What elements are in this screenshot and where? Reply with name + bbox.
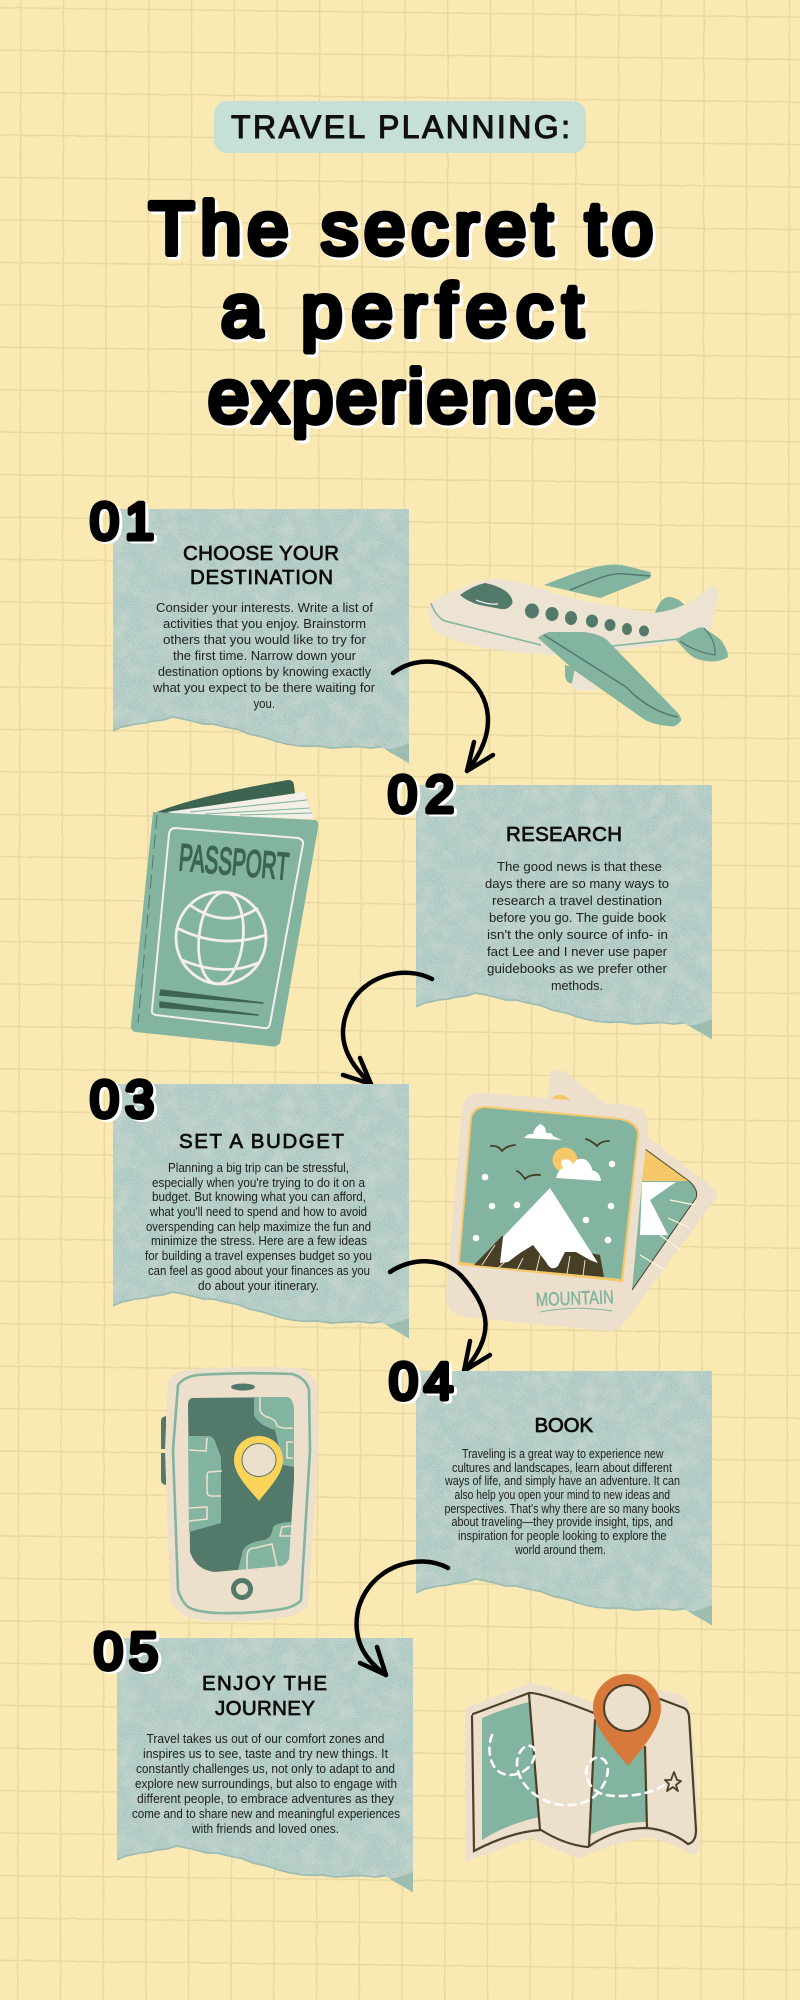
body text: step 4: perspectives. That's why there are so many books [444,1502,680,1516]
title: The secret to [149,187,653,270]
body text: step 4: cultures and landscapes, learn about different [452,1461,672,1475]
number 03: 03 [90,1071,154,1129]
icon: folded map with pin [465,1674,699,1862]
icon: passport [131,780,318,1047]
body text: step 5: come and to share new and meaningful experiences [132,1807,400,1821]
title badge [214,101,586,153]
heading: book: BOOK [534,1414,593,1437]
number 04: 04 [389,1353,453,1411]
arrow 2 to 3 [343,973,432,1084]
body text: step 2: fact Lee and I never use paper [487,945,667,959]
body text: step 3: can feel as good about your finances as you [148,1264,370,1278]
heading: choose your destination [183,542,339,589]
body text: step 3: especially when you're trying to do it on a [152,1176,365,1190]
body text: step 1: destination options by knowing exactly [158,665,372,679]
heading: enjoy the journey [202,1672,327,1720]
passport label: PASSPORT [177,837,290,889]
body text: step 2 [485,860,669,993]
heading: research: RESEARCH [506,823,622,846]
body text: step 5: Travel takes us out of our comfort zones and [146,1732,385,1746]
panel: 03 set a budget [90,1071,409,1338]
panel: 04 book [389,1353,712,1626]
body text: step 4: ways of life, and simply have an adventure. It can [444,1474,680,1488]
body text: step 1: what you expect to be there waiting for [152,681,375,695]
body text: step 2: isn't the only source of info- in [487,928,668,942]
body text: step 3: Planning a big trip can be stressful, [168,1161,349,1175]
number 01: 01 [90,493,154,551]
arrow 4 to 5 [357,1561,448,1675]
body text: step 2: methods. [551,979,603,993]
body text: step 1 [152,601,375,711]
body text: step 4: also help you open your mind to new ideas and [454,1488,670,1502]
arrow 3 to 4 [390,1261,490,1371]
body text: step 4: Traveling is a great way to experience new [462,1447,664,1461]
body text: step 2: before you go. The guide book [489,911,667,925]
body text: step 5: with friends and loved ones. [191,1822,339,1836]
mountain label: MOUNTAIN [535,1287,614,1311]
panel: 02 research [388,766,712,1040]
body text: step 5: different people, to embrace adventures as they [137,1792,395,1806]
body text: step 3: minimize the stress. Here are a few ideas [151,1234,367,1248]
body text: step 1: the first time. Narrow down your [173,649,356,663]
body text: step 5 [132,1732,400,1836]
title [149,187,653,438]
body text: step 4: inspiration for people looking to explore the [458,1529,667,1543]
body text: step 3 [145,1161,372,1293]
body text: step 1: activities that you enjoy. Brainstorm [163,617,366,631]
heading: enjoy the journey: JOURNEY [215,1697,315,1720]
body text: step 1: others that you would like to try for [163,633,366,647]
panel: 01 choose your destination [90,493,409,764]
icon: airplane [428,565,728,726]
number 05: 05 [94,1623,158,1681]
icon: smartphone map [161,1367,318,1621]
body text: step 2: research a travel destination [492,894,662,908]
body text: step 5: constantly challenges us, not only to adapt to and [136,1762,395,1776]
heading: enjoy the journey: ENJOY THE [202,1672,327,1695]
body text: step 3: overspending can help maximize the fun and [146,1220,371,1234]
body text: step 3: budget. But knowing what you can afford, [152,1190,366,1204]
title badge: TRAVEL PLANNING: [231,109,570,145]
body text: step 2: The good news is that these [497,860,662,874]
body text: step 3: do about your itinerary. [198,1279,319,1293]
body text: step 3: what you'll need to spend and how to avoid [149,1205,367,1219]
body text: step 1: Consider your interests. Write a list of [156,601,374,615]
body text: step 2: days there are so many ways to [485,877,669,891]
arrow 1 to 2 [393,662,493,771]
heading: set a budget: SET A BUDGET [179,1130,344,1153]
title: a perfect [221,269,583,352]
body text: step 4: world around them. [514,1543,606,1557]
body text: step 4: about traveling—they provide insight, tips, and [452,1515,673,1529]
icon: mountain photos [446,1070,718,1331]
body text: step 5: explore new surroundings, but also to engage with [135,1777,397,1791]
heading: choose your destination: CHOOSE YOUR [183,542,339,565]
title: experience [208,355,596,438]
body text: step 2: guidebooks as we prefer other [487,962,667,976]
heading: choose your destination: DESTINATION [190,566,333,589]
body text: step 5: inspires us to see, taste and try new things. It [143,1747,389,1761]
number 02: 02 [388,766,454,824]
body text: step 1: you. [254,697,275,711]
body text: step 4 [444,1447,680,1557]
body text: step 3: for building a travel expenses budget so you [145,1249,372,1263]
panel: 05 enjoy the journey [94,1623,413,1892]
